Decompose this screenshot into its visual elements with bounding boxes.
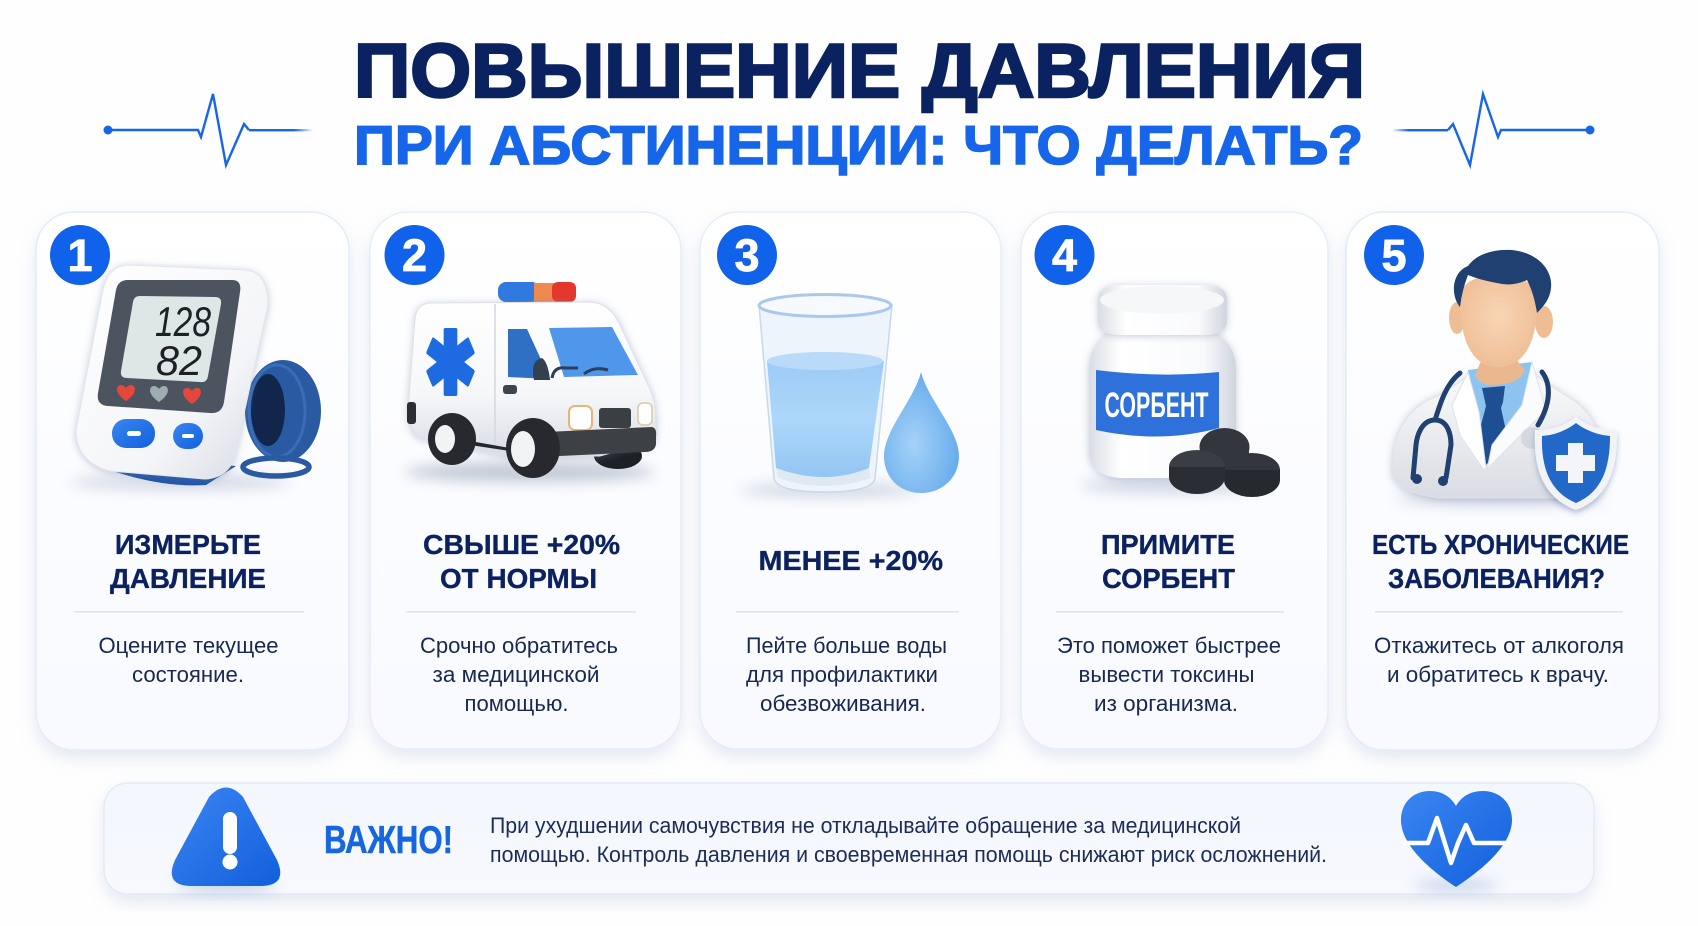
icon: warning triangle [172, 788, 280, 891]
title [354, 29, 1365, 176]
heading: ЗАБОЛЕВАНИЯ? [1388, 563, 1605, 594]
heading [1101, 529, 1235, 594]
number badge 3 [717, 225, 777, 285]
heading: ЕСТЬ ХРОНИЧЕСКИЕ [1372, 529, 1629, 560]
icon: blood pressure monitor: 82 [156, 337, 202, 384]
panel: step 5 [1346, 212, 1659, 750]
description: Откажитесь от алкоголя [1374, 633, 1624, 658]
number badge 2 [384, 225, 444, 285]
notice text: При ухудшении самочувствия не откладывайте обращение за медицинской [490, 813, 1241, 838]
stethoscope [1413, 372, 1548, 478]
panel: step 3 [700, 212, 1001, 749]
description [746, 633, 947, 716]
description: за медицинской [432, 662, 600, 687]
number badge 1: 1 [67, 230, 93, 281]
description: для профилактики [746, 662, 938, 687]
icon: blood pressure monitor: 128 [155, 298, 212, 345]
notice text [490, 813, 1327, 867]
heading: ДАВЛЕНИЕ [110, 563, 266, 594]
important label: ВАЖНО! [324, 819, 453, 862]
icon: sorbent bottle: СОРБЕНТ [1104, 386, 1208, 425]
heading [1372, 529, 1629, 594]
number badge 4: 4 [1052, 230, 1077, 281]
number badge 5: 5 [1381, 230, 1407, 281]
panel: step 1 [36, 212, 349, 750]
description [1374, 633, 1624, 687]
description: вывести токсины [1078, 662, 1254, 687]
heading: СВЫШЕ +20% [423, 529, 620, 560]
icon: right pulse line [1392, 94, 1594, 165]
icon: sorbent bottle [1080, 285, 1280, 497]
heading: ПРИМИТЕ [1101, 529, 1235, 560]
heading [423, 529, 620, 594]
icon: blood pressure monitor [70, 265, 321, 490]
heading: СОРБЕНТ [1102, 563, 1235, 594]
number badge 3: 3 [734, 230, 760, 281]
description: состояние. [132, 662, 244, 687]
description [98, 633, 278, 687]
icon: ambulance [405, 282, 656, 482]
panel: step 4 [1021, 212, 1328, 749]
description: помощью. [464, 691, 568, 716]
icon: glass of water [740, 294, 920, 497]
panel: important notice [104, 783, 1594, 894]
icon: medical shield [1535, 417, 1617, 510]
notice text: помощью. Контроль давления и своевременная помощь снижают риск осложнений. [490, 842, 1327, 867]
number badge 2: 2 [402, 230, 427, 281]
heading: ИЗМЕРЬТЕ [115, 529, 261, 560]
description [420, 633, 618, 716]
heading: МЕНЕЕ +20% [758, 545, 943, 576]
heading [110, 529, 266, 594]
description: Срочно обратитесь [420, 633, 618, 658]
heading: ОТ НОРМЫ [440, 563, 597, 594]
description: Оцените текущее [98, 633, 278, 658]
head [1449, 302, 1465, 334]
description: из организма. [1094, 691, 1238, 716]
icon: doctor [1392, 250, 1605, 505]
title line 2: ПРИ АБСТИНЕНЦИИ: ЧТО ДЕЛАТЬ? [354, 114, 1363, 176]
description [1057, 633, 1281, 716]
description: Это поможет быстрее [1057, 633, 1281, 658]
star of life [426, 328, 475, 396]
panel: step 2 [370, 212, 681, 749]
charcoal tablets [1169, 428, 1280, 497]
description: Пейте больше воды [746, 633, 947, 658]
icon: water drop [884, 372, 959, 493]
number badge 5 [1364, 225, 1424, 285]
description: и обратитесь к врачу. [1387, 662, 1609, 687]
title line 1: ПОВЫШЕНИЕ ДАВЛЕНИЯ [354, 29, 1365, 114]
description: обезвоживания. [760, 691, 926, 716]
icon: heart with pulse [1401, 791, 1512, 890]
icon: left pulse line [104, 94, 313, 165]
number badge 4 [1034, 225, 1094, 285]
number badge 1 [50, 225, 110, 285]
